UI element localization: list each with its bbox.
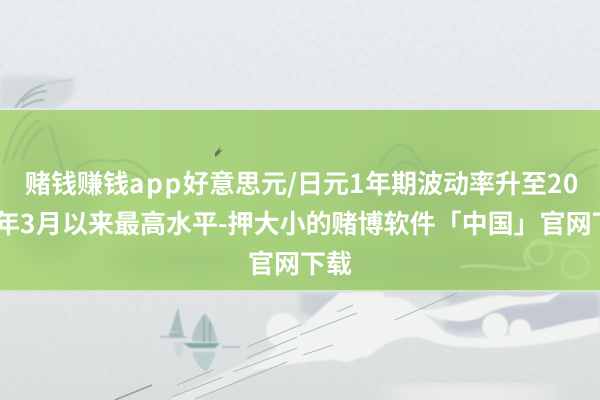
soft wash shading in band	[5, 120, 600, 285]
title line 3: 官网下载	[248, 244, 352, 281]
icon: flying bird	[215, 146, 223, 157]
green title band	[0, 110, 600, 290]
title line 1: 赌钱赚钱app好意思元/日元1年期波动率升至20	[25, 164, 579, 201]
cloud swirls and diagonal streaks	[115, 285, 600, 400]
sailboats	[160, 307, 240, 372]
white streak bands	[172, 337, 300, 400]
faded mountains inside band	[4, 112, 598, 195]
mountain peak above band	[0, 75, 76, 110]
pale clouds in band	[460, 240, 590, 278]
faint band edges	[0, 108, 600, 292]
